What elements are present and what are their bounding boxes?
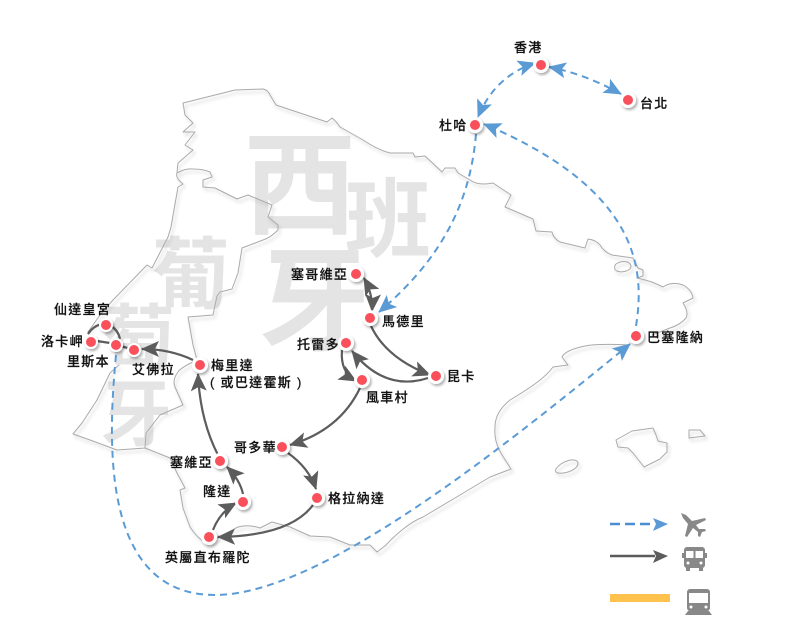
city labels: 梅里達 <box>211 358 254 373</box>
icon: train <box>685 589 712 615</box>
background country names: 牙 <box>258 240 370 365</box>
city labels: 塞哥維亞 <box>291 267 348 282</box>
marker: Sintra <box>99 318 113 332</box>
route: Doha to Madrid <box>379 134 476 312</box>
city markers <box>84 57 644 545</box>
city labels: 托雷多 <box>297 337 340 352</box>
route: Granada to Gibraltar <box>218 505 313 537</box>
city labels: 塞維亞 <box>170 455 213 470</box>
legend: train line <box>610 594 670 602</box>
background country names: 萄 <box>103 300 175 380</box>
route: Evora to Lisbon <box>120 346 128 348</box>
city labels: 昆卡 <box>447 369 476 384</box>
route: Lisbon to Cabo da Roca <box>97 341 110 343</box>
route: Cabo da Roca to Sintra <box>88 324 102 334</box>
route: Cordoba to Granada <box>288 453 316 489</box>
air routes <box>112 63 639 595</box>
icon: bus <box>682 547 707 571</box>
route: Barcelona to Doha <box>484 124 639 326</box>
route: Lisbon to Barcelona <box>112 344 630 595</box>
marker: Segovia <box>348 266 364 282</box>
city labels: 格拉納達 <box>328 491 385 506</box>
map coastline <box>73 89 705 552</box>
marker: Madrid <box>362 310 378 326</box>
marker: Seville <box>212 453 228 469</box>
city labels: 杜哈 <box>439 118 468 133</box>
city labels: 香港 <box>514 40 543 55</box>
city labels: 隆達 <box>203 484 232 499</box>
legend: bus arrow <box>610 555 655 557</box>
city labels: 台北 <box>640 96 669 111</box>
marker: Evora <box>127 343 141 357</box>
legend: flight arrowhead <box>653 518 668 531</box>
city labels: 英屬直布羅陀 <box>165 550 251 565</box>
legend: bus arrowhead <box>653 550 668 563</box>
city labels <box>41 40 704 565</box>
city labels: 馬德里 <box>382 314 425 329</box>
route: Sintra to Lisbon <box>111 326 120 339</box>
background country names: 牙 <box>100 376 172 456</box>
route: Toledo to Windmill village <box>342 350 356 381</box>
route: Hong Kong to Doha <box>478 63 535 117</box>
marker: Lisbon <box>109 338 123 352</box>
marker: Cabo da Roca <box>84 335 98 349</box>
route: Windmill village to Cordoba <box>290 388 360 445</box>
route: Ronda to Seville <box>227 467 243 494</box>
marker: Merida <box>192 357 208 373</box>
route: Merida to Evora <box>142 349 193 360</box>
marker: Gibraltar <box>201 529 217 545</box>
legend <box>610 513 712 615</box>
city labels: 仙達皇宮 <box>54 302 111 317</box>
route: Gibraltar to Ronda <box>213 503 236 530</box>
marker: Cordoba <box>274 439 290 455</box>
city labels: ( 或巴達霍斯 ) <box>210 375 303 390</box>
marker: Toledo <box>338 335 354 351</box>
city labels: 巴塞隆納 <box>647 330 704 345</box>
route: Segovia and Madrid <box>364 278 372 311</box>
background country names <box>100 124 431 456</box>
icon: plane <box>681 513 706 537</box>
city labels: 洛卡岬 <box>41 334 84 349</box>
background country names: 班 <box>345 173 431 269</box>
marker: Granada <box>309 490 325 506</box>
route: Madrid to Cuenca <box>371 326 430 375</box>
bus routes <box>88 278 430 537</box>
background country names: 葡 <box>152 231 230 319</box>
marker: Cuenca <box>428 368 444 384</box>
marker: Barcelona <box>628 328 644 344</box>
background country names: 西 <box>244 124 356 249</box>
marker: Ronda <box>235 494 251 510</box>
legend: flight arrow <box>610 523 654 525</box>
marker: Windmill village <box>354 372 370 388</box>
islands <box>615 262 631 272</box>
route: Cuenca to Toledo <box>352 351 428 382</box>
city labels: 里斯本 <box>67 354 110 369</box>
marker: Taipei <box>620 92 636 108</box>
route: Seville to Merida <box>198 374 218 455</box>
city labels: 風車村 <box>366 390 409 405</box>
city labels: 哥多華 <box>234 440 277 455</box>
route: Taipei to Hong Kong <box>549 67 621 94</box>
marker: Doha <box>467 117 483 133</box>
marker: Hong Kong <box>533 57 549 73</box>
city labels: 艾佛拉 <box>132 362 175 377</box>
